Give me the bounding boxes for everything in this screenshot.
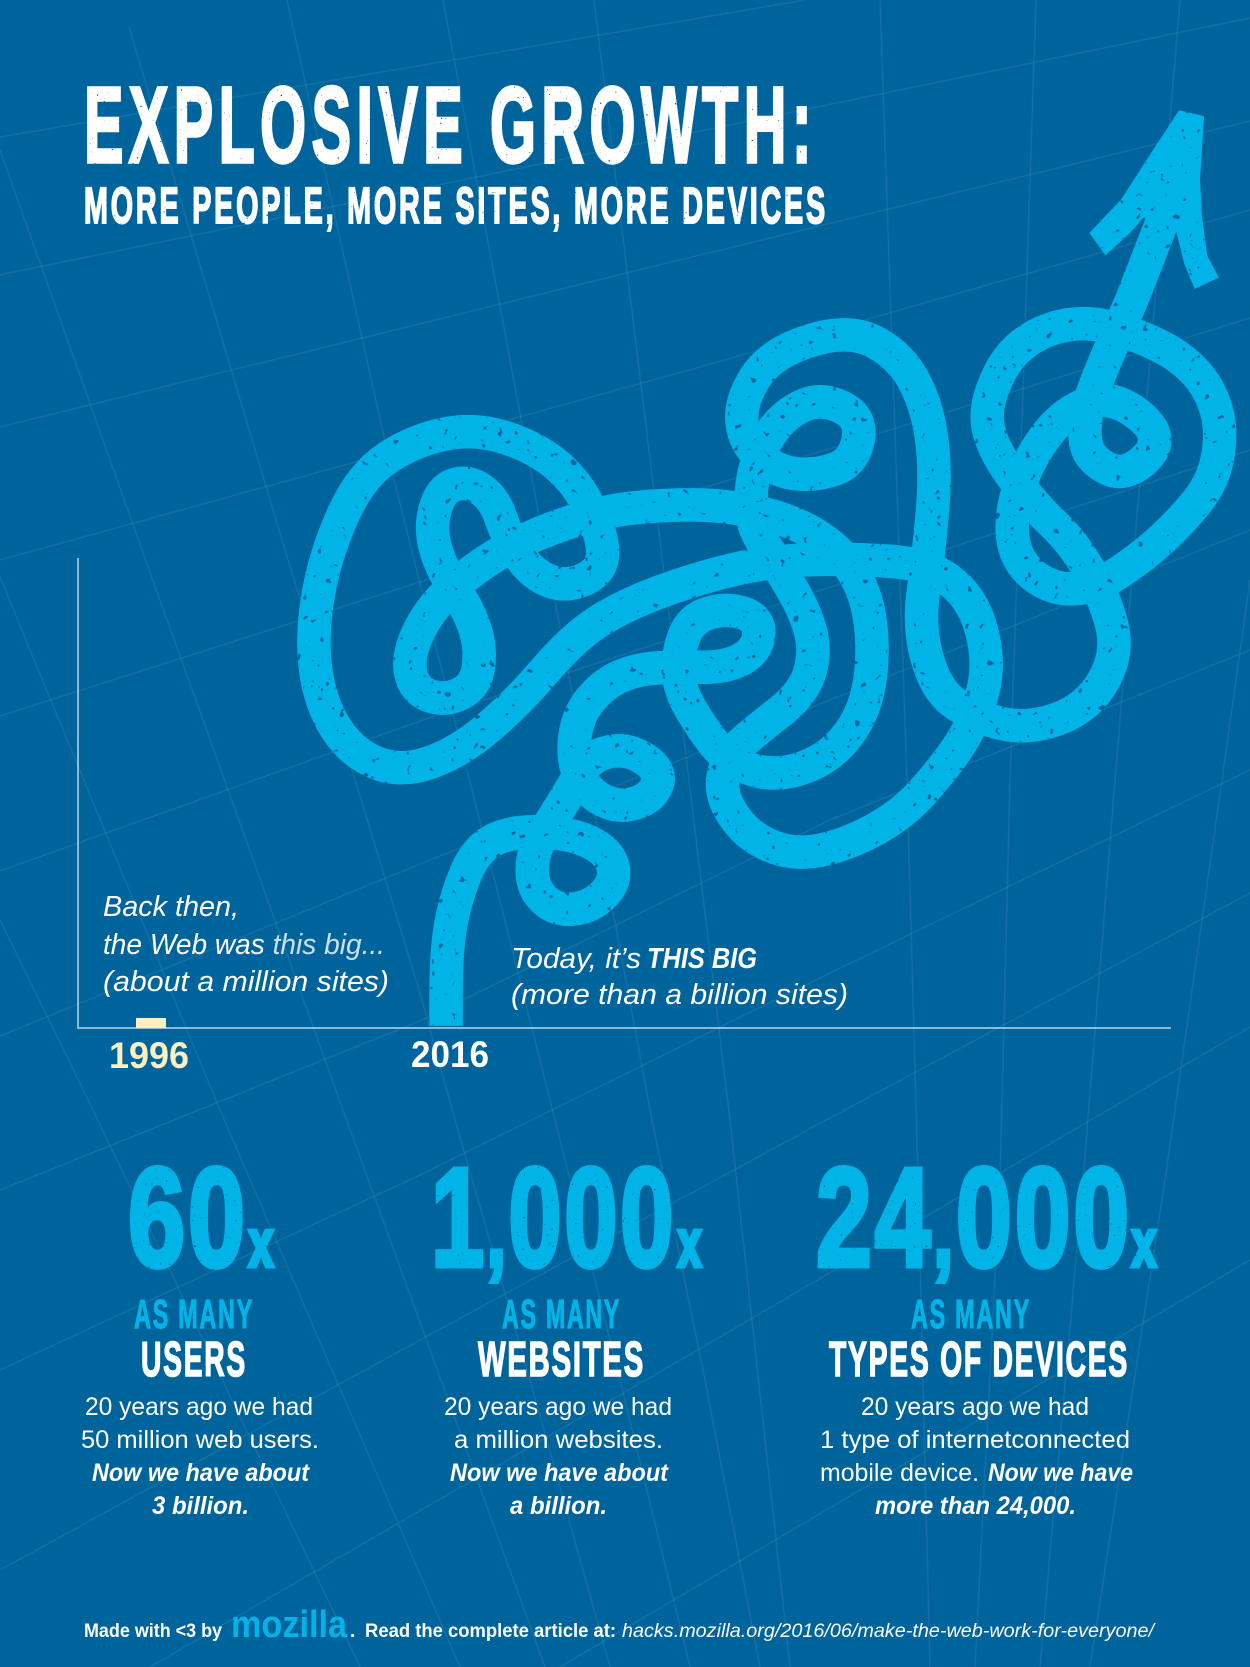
devices description bbox=[820, 1393, 1133, 1520]
annotation: today: THIS BIG bbox=[647, 943, 757, 975]
annotation: back then: the Web was this big... bbox=[103, 929, 385, 961]
number 24000x: x bbox=[1132, 1206, 1156, 1280]
users description: 3 billion. bbox=[152, 1492, 249, 1520]
growth line with arrow bbox=[314, 110, 1220, 1026]
mozilla wordmark: mozilla bbox=[231, 1604, 348, 1646]
websites description: Now we have about bbox=[450, 1459, 670, 1487]
websites description: a billion. bbox=[510, 1492, 607, 1520]
footer bbox=[84, 1604, 1156, 1646]
annotation: today: Today, it’s bbox=[511, 943, 641, 975]
stat: devices bbox=[816, 1138, 1156, 1520]
devices description: 20 years ago we had bbox=[861, 1393, 1089, 1421]
users label: USERS bbox=[141, 1333, 247, 1387]
label: 1996: 1996 bbox=[109, 1035, 189, 1076]
websites label: WEBSITES bbox=[478, 1333, 645, 1387]
websites description: 20 years ago we had bbox=[444, 1393, 672, 1421]
websites description bbox=[444, 1393, 672, 1520]
users description: Now we have about bbox=[92, 1459, 311, 1487]
devices description: more than 24,000. bbox=[875, 1492, 1076, 1520]
annotation: today bbox=[511, 943, 848, 1011]
number 60x: x bbox=[249, 1206, 273, 1280]
annotation: back then: (about a million sites) bbox=[103, 966, 389, 998]
stat: websites bbox=[431, 1138, 701, 1520]
title bbox=[84, 64, 828, 234]
users description: 20 years ago we had bbox=[85, 1393, 313, 1421]
users description: 50 million web users. bbox=[81, 1426, 319, 1454]
footer: . bbox=[350, 1621, 355, 1642]
devices description: 1 type of internetconnected bbox=[820, 1426, 1130, 1454]
websites description: a million websites. bbox=[454, 1426, 663, 1454]
annotation: today: (more than a billion sites) bbox=[511, 979, 848, 1011]
number 1000x: 1,000 bbox=[431, 1138, 676, 1296]
annotation: back then bbox=[103, 891, 389, 998]
as many: AS MANY bbox=[502, 1291, 621, 1337]
devices description: mobile device. bbox=[820, 1459, 979, 1487]
as many: AS MANY bbox=[134, 1291, 254, 1337]
footer: Made with <3 by bbox=[84, 1621, 222, 1642]
users description bbox=[81, 1393, 319, 1520]
footer: hacks.mozilla.org/2016/06/make-the-web-work-for-everyone/ bbox=[622, 1621, 1156, 1642]
number 60x: 60 bbox=[128, 1138, 248, 1296]
number 1000x: x bbox=[678, 1206, 701, 1280]
1996 bar bbox=[136, 1018, 166, 1028]
number 24000x: 24,000 bbox=[816, 1138, 1132, 1296]
as many: AS MANY bbox=[911, 1291, 1031, 1337]
stat: users bbox=[81, 1138, 319, 1520]
footer: Read the complete article at: bbox=[365, 1621, 616, 1642]
annotation: back then: Back then, bbox=[103, 891, 239, 923]
chart axes bbox=[78, 558, 1171, 1028]
devices description: Now we have bbox=[988, 1459, 1133, 1487]
label: 2016: 2016 bbox=[411, 1034, 489, 1075]
